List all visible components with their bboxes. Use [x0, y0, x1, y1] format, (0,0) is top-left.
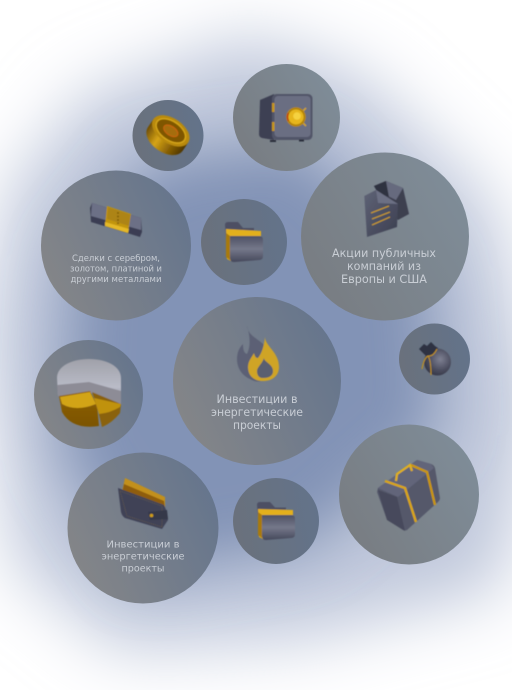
text: metals: золотом, платиной и [70, 264, 162, 274]
text: wallet: энергетические [102, 552, 184, 562]
text: public stocks [332, 247, 436, 286]
text: metals [70, 254, 162, 285]
text: metals: Сделки с серебром, [72, 254, 160, 264]
panel: safe [233, 64, 340, 171]
text: wallet: проекты [122, 564, 164, 574]
text: metals: другими металлами [70, 275, 162, 285]
panel: folder second [233, 478, 319, 564]
panel: bomb bag [399, 324, 470, 394]
text: public stocks: Акции публичных [332, 247, 436, 260]
icon: gold bar [90, 203, 142, 237]
text: energy: Инвестиции в [216, 393, 298, 406]
panel: energy [173, 297, 341, 465]
icon: documents [364, 181, 409, 237]
text: energy [211, 393, 303, 432]
icon: folder [225, 222, 263, 262]
text: public stocks: компаний из [347, 260, 421, 273]
panel: pie chart [34, 340, 143, 449]
panel: metals [41, 170, 191, 320]
panel: briefcase [339, 424, 479, 564]
icon: pie chart [57, 359, 121, 427]
panel: wallet [68, 452, 218, 604]
icon: safe [259, 94, 312, 142]
text: energy: проекты [233, 419, 281, 432]
panel: folder [201, 199, 287, 285]
icon: pouch [419, 342, 451, 376]
text: energy: энергетические [211, 406, 303, 419]
text: wallet: Инвестиции в [106, 540, 180, 550]
text: public stocks: Европы и США [341, 273, 427, 286]
text: wallet [102, 540, 184, 574]
panel: coin [132, 100, 204, 171]
icon: folder second [257, 502, 295, 540]
icon: flame [237, 326, 279, 382]
icon: wallet [118, 478, 168, 529]
panel: public stocks [301, 152, 469, 320]
icon: briefcase [377, 460, 440, 531]
icon: gold coin [141, 109, 195, 162]
